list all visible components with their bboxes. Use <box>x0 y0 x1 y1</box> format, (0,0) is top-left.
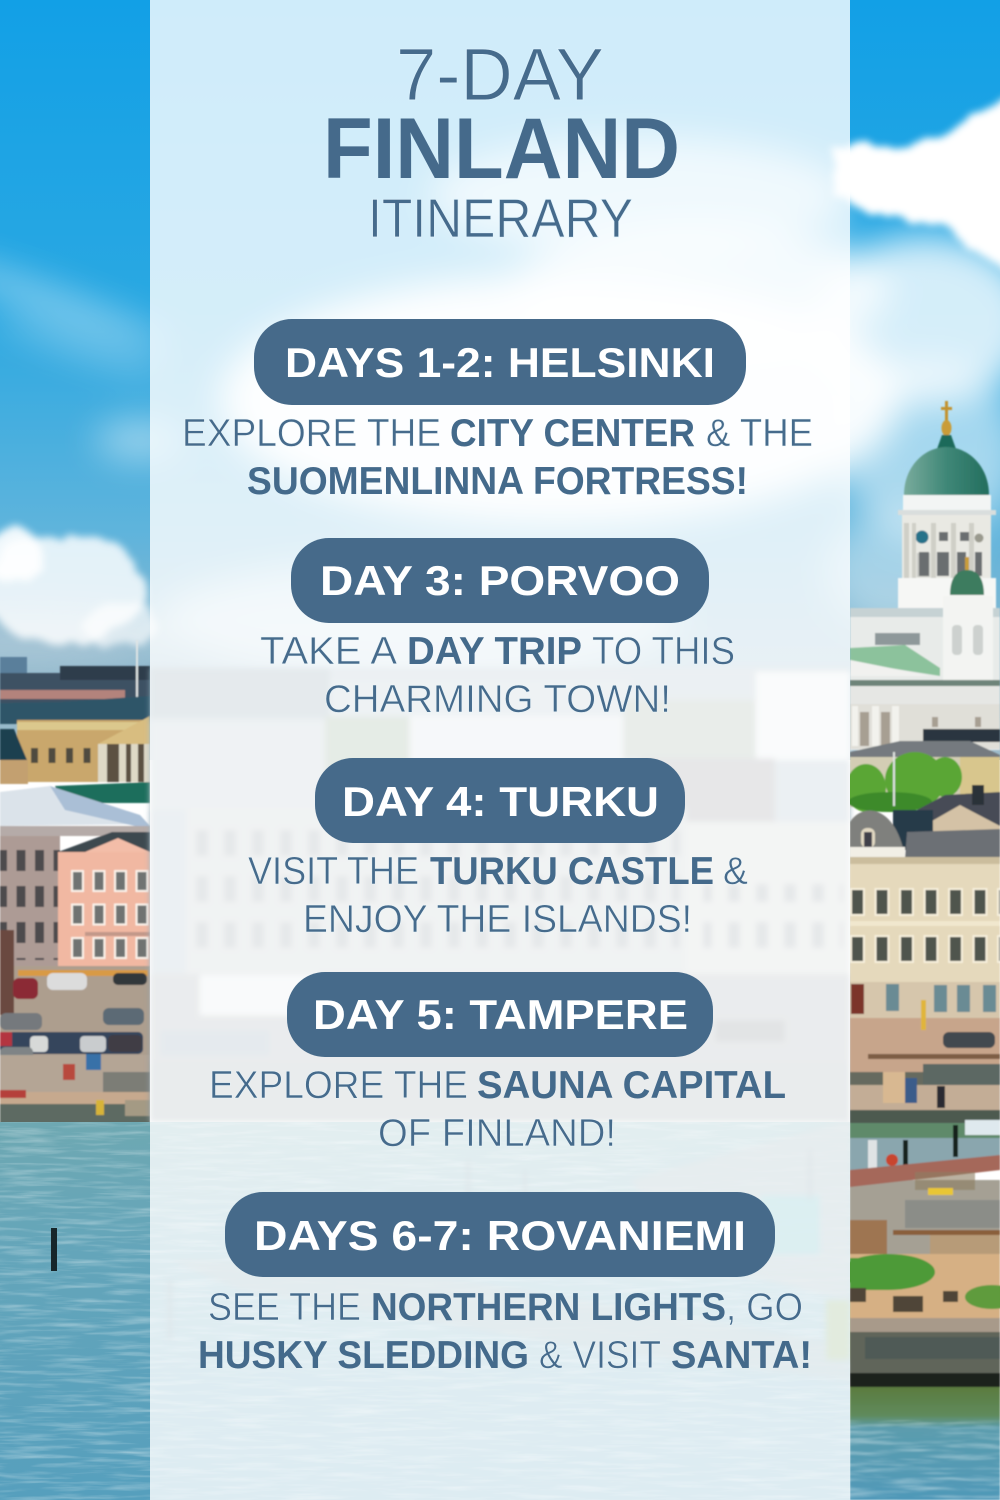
description: Tampere: EXPLORE THE <box>209 1064 468 1107</box>
description: Tampere <box>209 1064 786 1155</box>
section: day 5 Tampere <box>209 972 786 1155</box>
cream palace <box>849 810 1000 1020</box>
description: Turku: & <box>723 850 748 893</box>
description: Porvoo: TAKE A <box>260 630 397 673</box>
pill heading: Porvoo: DAY 3: PORVOO <box>320 557 680 604</box>
description: Rovaniemi <box>198 1286 812 1377</box>
description: Rovaniemi: SEE THE <box>208 1286 361 1329</box>
section: day 3 Porvoo <box>260 538 735 721</box>
water <box>0 1122 850 1500</box>
pill heading: Turku <box>315 758 685 843</box>
description: Tampere: SAUNA CAPITAL <box>477 1064 786 1107</box>
pill heading: Rovaniemi <box>225 1192 775 1277</box>
description: Helsinki: CITY CENTER <box>450 412 695 455</box>
description: Turku: TURKU CASTLE <box>430 850 714 893</box>
description: Porvoo: CHARMING TOWN! <box>324 678 671 721</box>
translucent white centre panel <box>150 0 850 1500</box>
title line: FINLAND: FINLAND <box>323 101 680 197</box>
trees <box>846 752 962 812</box>
description: Turku: VISIT THE <box>248 850 419 893</box>
description: Turku <box>248 850 748 941</box>
description: Porvoo: DAY TRIP <box>407 630 582 673</box>
pill heading: Turku: DAY 4: TURKU <box>342 778 659 825</box>
section: days 6-7 Rovaniemi <box>198 1192 812 1377</box>
section: day 4 Turku <box>248 758 748 941</box>
clouds <box>0 99 1000 680</box>
section: days 1-2 Helsinki <box>182 319 813 503</box>
description: Rovaniemi: NORTHERN LIGHTS <box>371 1286 726 1329</box>
pill heading: Rovaniemi: DAYS 6-7: ROVANIEMI <box>254 1212 746 1259</box>
description: Porvoo <box>260 630 735 721</box>
title <box>323 33 680 249</box>
quay plaza <box>850 1018 1000 1073</box>
description: Rovaniemi: & VISIT <box>539 1334 661 1377</box>
description: Turku: ENJOY THE ISLANDS! <box>303 898 692 941</box>
title line: 7-DAY: 7-DAY <box>396 33 604 116</box>
midground roofs <box>923 729 1000 742</box>
pill heading: Tampere <box>287 972 713 1057</box>
parked cars <box>0 973 147 1064</box>
sky <box>0 0 1000 760</box>
cathedral and right side buildings <box>841 401 1000 1500</box>
description: Rovaniemi: , GO <box>726 1286 803 1329</box>
pill heading: Porvoo <box>291 538 709 623</box>
pier and beach <box>850 1180 1000 1256</box>
ghost jetty in lower panel <box>170 1120 850 1380</box>
description: Rovaniemi: SANTA! <box>671 1334 812 1377</box>
pill heading: Tampere: DAY 5: TAMPERE <box>313 991 688 1038</box>
description: Helsinki <box>182 412 813 503</box>
description: Porvoo: TO THIS <box>592 630 735 673</box>
title line: ITINERARY: ITINERARY <box>368 187 633 249</box>
pill heading: Helsinki <box>254 319 746 405</box>
description: Helsinki: SUOMENLINNA FORTRESS! <box>247 460 748 503</box>
cathedral <box>850 401 1000 750</box>
description: Helsinki: EXPLORE THE <box>182 412 441 455</box>
mooring post <box>51 1228 57 1271</box>
description: Helsinki: & THE <box>706 412 813 455</box>
description: Tampere: OF FINLAND! <box>378 1112 616 1155</box>
central ghost cityscape behind panel <box>150 668 850 1122</box>
left side buildings and plaza <box>0 640 150 1124</box>
description: Rovaniemi: HUSKY SLEDDING <box>198 1334 529 1377</box>
pill heading: Helsinki: DAYS 1-2: HELSINKI <box>285 339 715 386</box>
